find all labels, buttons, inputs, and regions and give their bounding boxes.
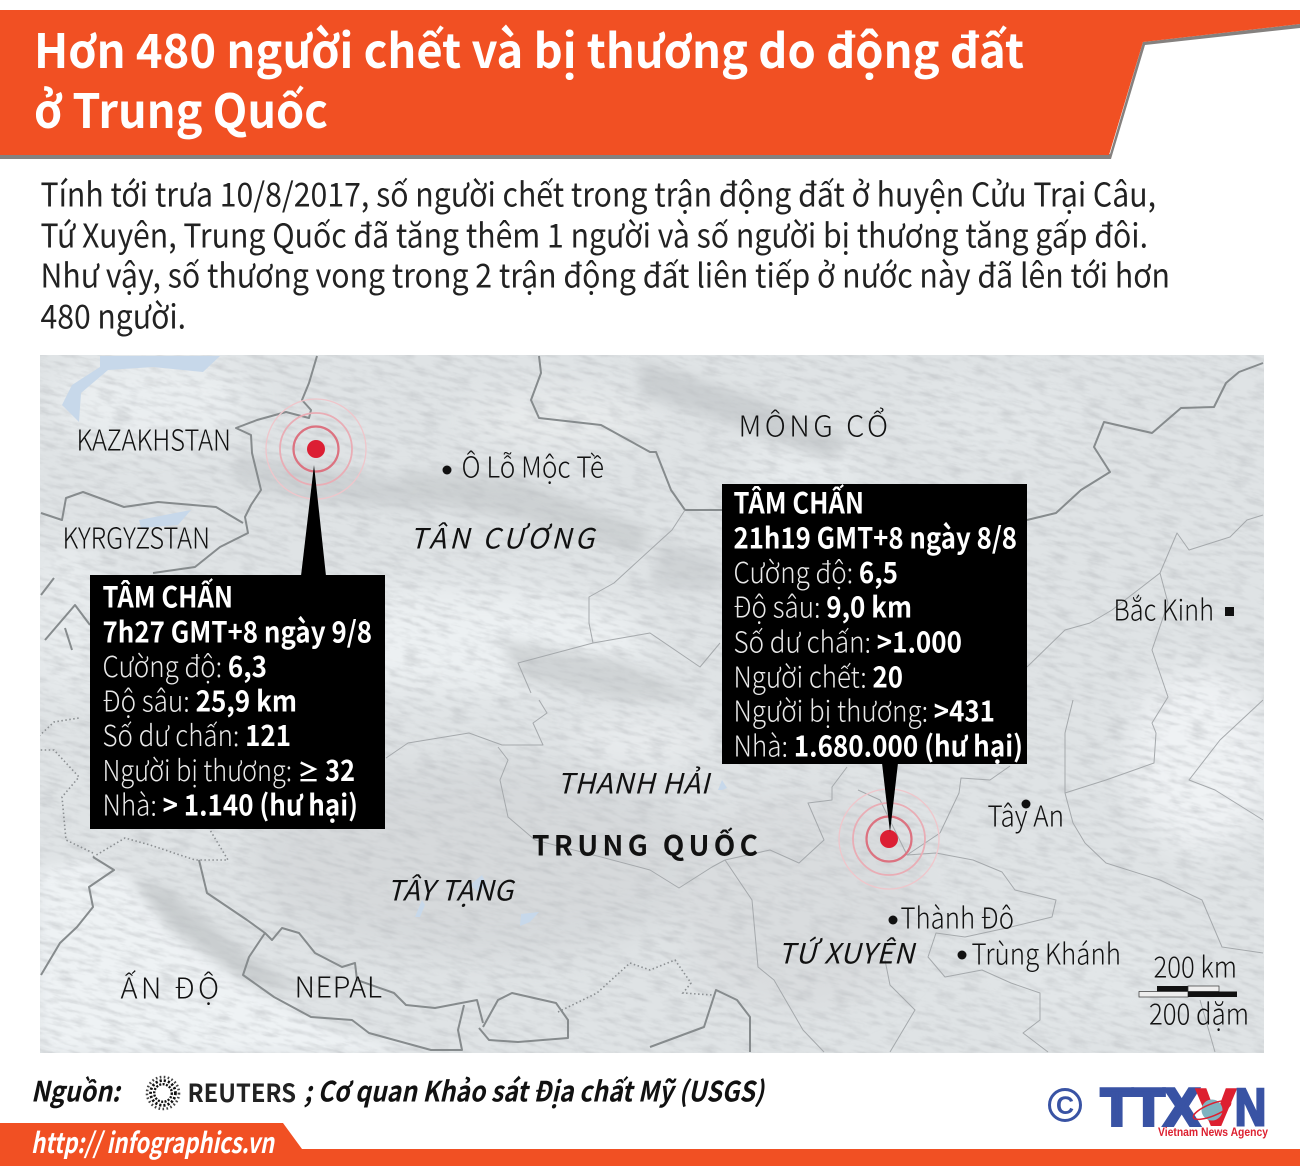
callout: Xinjiang earthquake bbox=[90, 465, 385, 829]
logo: TTXVN: V bbox=[1196, 1079, 1236, 1137]
logo: TTXVN: Vietnam News Agency bbox=[1158, 1127, 1269, 1139]
epicenter marker: Sichuan bbox=[839, 789, 939, 889]
source line: Nguồn: bbox=[31, 1070, 122, 1110]
lakes bbox=[62, 356, 727, 926]
scale bar: 200 dặm bbox=[1149, 992, 1249, 1034]
title: Hơn 480 người chết và bị thương do động đất bbox=[34, 13, 1024, 82]
icon: copyright symbol bbox=[1050, 1090, 1080, 1120]
intro paragraph: 480 người. bbox=[40, 290, 186, 338]
logo: TTXVN bbox=[1050, 1079, 1269, 1139]
region and city labels: KYRGYZSTAN bbox=[62, 516, 210, 558]
title: ở Trung Quốc bbox=[34, 73, 328, 142]
region and city labels: THANH HẢI bbox=[557, 762, 712, 802]
callout: Sichuan earthquake: Độ sâu: 9,0 km bbox=[734, 584, 912, 626]
source line bbox=[31, 1070, 765, 1110]
logo: TTXVN: TTX bbox=[1101, 1079, 1199, 1137]
disputed border lines bbox=[37, 718, 712, 1012]
website url: http:// infographics.vn bbox=[31, 1122, 276, 1162]
map terrain background bbox=[30, 355, 1270, 1053]
icon: globe bbox=[1191, 1097, 1233, 1123]
callout: Xinjiang earthquake: Số dư chấn: 121 bbox=[102, 713, 291, 755]
region and city labels: Thành Đô bbox=[900, 896, 1014, 938]
region and city labels bbox=[62, 404, 1234, 1008]
region and city labels: Bắc Kinh bbox=[1114, 588, 1214, 630]
region and city labels: MÔNG CỔ bbox=[738, 404, 888, 446]
callout: Sichuan earthquake: 21h19 GMT+8 ngày 8/8 bbox=[734, 516, 1017, 558]
region and city labels: Trùng Khánh bbox=[972, 932, 1121, 974]
callout: Sichuan earthquake: Nhà: 1.680.000 (hư hại) bbox=[734, 724, 1023, 766]
intro paragraph: Tứ Xuyên, Trung Quốc đã tăng thêm 1 người và số người bị thương tăng gấp đôi. bbox=[40, 210, 1148, 258]
footer band bbox=[0, 1122, 1300, 1166]
region and city labels: ẤN ĐỘ bbox=[120, 966, 219, 1008]
icon: copyright symbol: C bbox=[1056, 1092, 1074, 1120]
callout: Sichuan earthquake bbox=[722, 480, 1027, 832]
region and city labels: NEPAL bbox=[294, 964, 382, 1006]
callout: Xinjiang earthquake: Cường độ: 6,3 bbox=[102, 644, 267, 686]
logo: TTXVN: N bbox=[1235, 1079, 1266, 1137]
region and city labels: KAZAKHSTAN bbox=[76, 418, 231, 460]
country borders bbox=[41, 356, 1263, 1052]
region and city labels: TRUNG QUỐC bbox=[532, 824, 758, 864]
callout: Xinjiang earthquake: TÂM CHẤN bbox=[102, 574, 233, 616]
callout: Sichuan earthquake: Cường độ: 6,5 bbox=[734, 550, 898, 592]
title bbox=[34, 13, 1024, 142]
callout: Sichuan earthquake: Số dư chấn: >1.000 bbox=[734, 620, 962, 662]
header banner bbox=[0, 10, 1300, 159]
icon: Reuters logo bbox=[147, 1077, 179, 1109]
province borders bbox=[386, 510, 1263, 1052]
source line: REUTERS bbox=[188, 1074, 296, 1110]
callout: Xinjiang earthquake: Độ sâu: 25,9 km bbox=[102, 678, 297, 720]
scale bar bbox=[1139, 944, 1249, 1034]
callout: Sichuan earthquake: Người bị thương: >431 bbox=[734, 688, 995, 730]
source line: ; Cơ quan Khảo sát Địa chất Mỹ (USGS) bbox=[304, 1070, 765, 1110]
region and city labels: TỨ XUYÊN bbox=[778, 932, 917, 972]
scale bar: 200 km bbox=[1154, 944, 1237, 986]
region and city labels: Ô Lỗ Mộc Tề bbox=[462, 444, 604, 486]
intro paragraph: Như vậy, số thương vong trong 2 trận động đất liên tiếp ở nước này đã lên tới hơn bbox=[40, 250, 1170, 298]
callout: Sichuan earthquake: Người chết: 20 bbox=[734, 654, 903, 696]
callout: Xinjiang earthquake: Nhà: > 1.140 (hư hại) bbox=[102, 782, 358, 824]
region and city labels: TÂN CƯƠNG bbox=[410, 518, 597, 558]
epicenter marker: Xinjiang bbox=[266, 399, 366, 499]
intro paragraph: Tính tới trưa 10/8/2017, số người chết trong trận động đất ở huyện Cửu Trại Câu, bbox=[40, 168, 1156, 216]
callout: Xinjiang earthquake: Người bị thương: ≥ 32 bbox=[102, 748, 355, 790]
map panel bbox=[30, 355, 1270, 1053]
intro paragraph bbox=[40, 168, 1170, 338]
region and city labels: Tây An bbox=[988, 794, 1064, 836]
region and city labels: TÂY TẠNG bbox=[387, 870, 516, 910]
callout: Xinjiang earthquake: 7h27 GMT+8 ngày 9/8 bbox=[102, 610, 372, 652]
callout: Sichuan earthquake: TÂM CHẤN bbox=[734, 480, 864, 522]
